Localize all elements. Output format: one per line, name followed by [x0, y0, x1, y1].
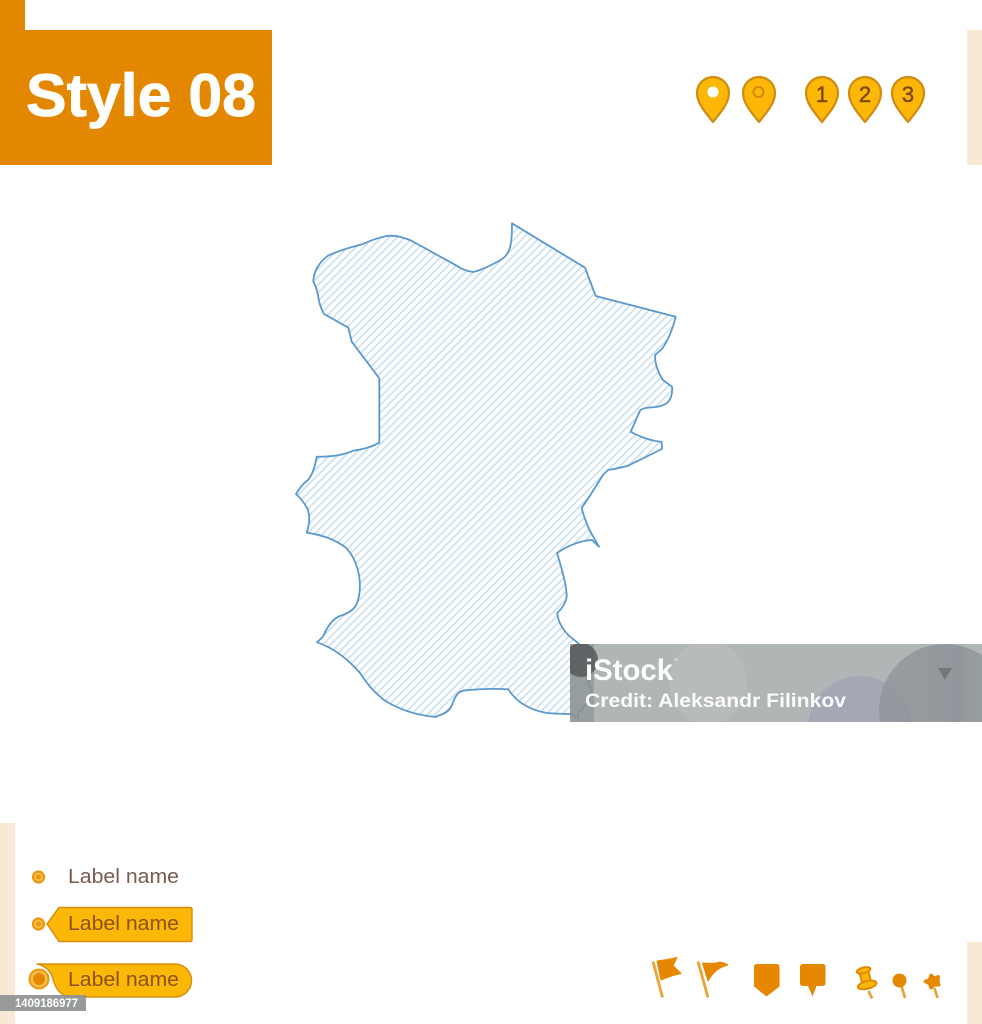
side bar: top right — [967, 30, 982, 165]
icon: push pin — [854, 965, 877, 998]
image id watermark — [0, 995, 86, 1011]
icon: pin number 1: 1 — [816, 82, 828, 107]
icon: pin with white dot — [697, 77, 729, 122]
label: tag — [33, 908, 192, 942]
icon: flag swallowtail — [653, 958, 681, 998]
watermark: iStock credit: ™ — [673, 658, 678, 664]
side bar: bottom right — [967, 942, 982, 1024]
icon: pin with ring — [743, 77, 775, 122]
icon: ball pin — [892, 974, 906, 998]
label: rounded tag — [30, 964, 192, 997]
icon: pin number 1 — [806, 77, 838, 122]
label: rounded tag: Label name — [68, 968, 179, 991]
title: Style 08 — [26, 62, 256, 129]
watermark: iStock credit: Credit: Aleksandr Filinkov — [585, 691, 846, 712]
watermark: iStock credit: iStock — [585, 654, 674, 687]
icon: pin number 3: 3 — [902, 82, 914, 107]
image id watermark: 1409186977 — [15, 998, 78, 1010]
label: tag: Label name — [68, 912, 179, 935]
icon: callout marker — [800, 964, 826, 996]
icon: star pin — [925, 975, 939, 998]
icon: pin number 2 — [849, 77, 881, 122]
icon: pin number 2: 2 — [859, 82, 871, 107]
icon: shield marker — [754, 964, 780, 996]
icon: flag pennant — [698, 962, 728, 998]
map: hatched region — [296, 223, 676, 718]
label: plain dot: Label name — [68, 865, 179, 888]
icon: pin number 3 — [892, 77, 924, 122]
watermark: iStock credit — [570, 644, 982, 722]
title — [0, 0, 272, 165]
side bar: bottom left — [0, 823, 15, 1024]
